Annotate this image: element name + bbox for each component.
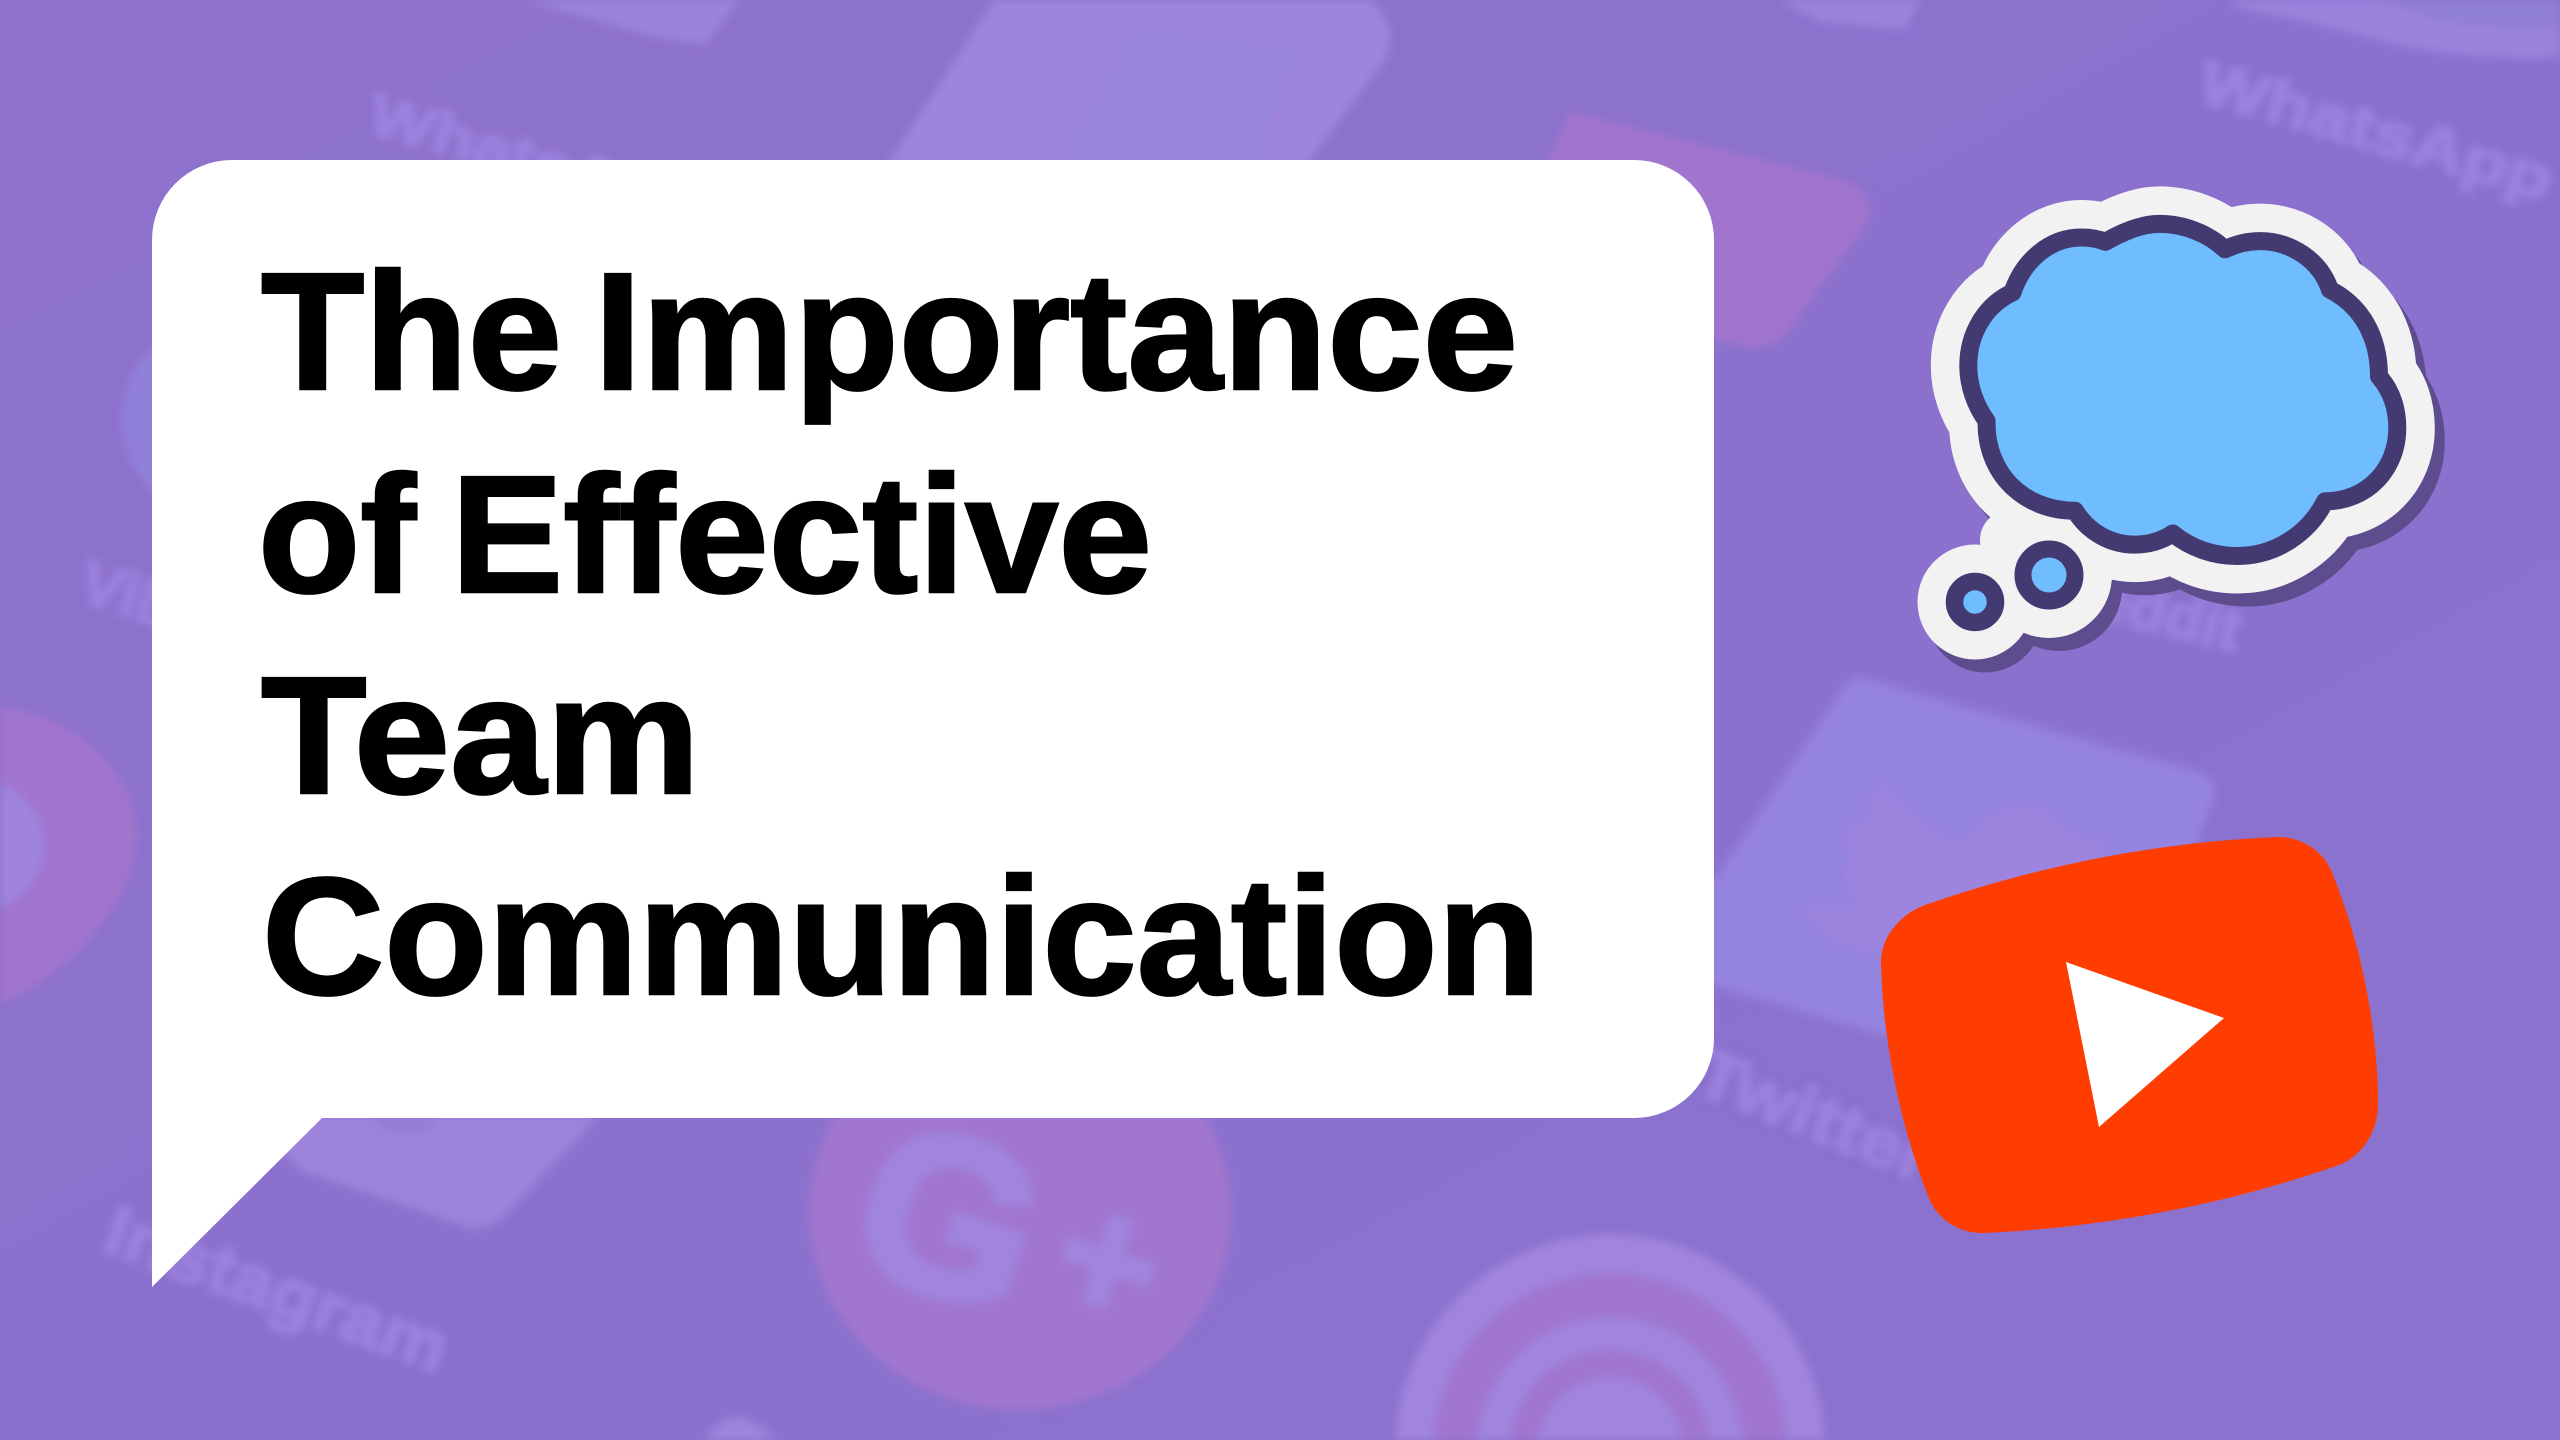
title: Importance	[594, 239, 1518, 425]
backdrop: instagram tile	[275, 1110, 600, 1228]
title: Effective	[451, 442, 1152, 628]
title: Team	[261, 643, 700, 829]
label: Instagram: Instagram	[95, 1191, 460, 1387]
backdrop: target rings	[1395, 1234, 1825, 1440]
large thought dot	[2023, 549, 2075, 601]
backdrop: top centre app tile	[887, 0, 1390, 165]
label: Reddit: Reddit	[2044, 552, 2248, 666]
backdrop: left blue circle	[122, 329, 278, 509]
cloud body	[1968, 224, 2397, 556]
icon: thought cloud	[1918, 224, 2407, 672]
backdrop: top fragments	[525, 0, 2560, 58]
label: Viber: Viber	[71, 548, 244, 663]
backdrop: pink video tile	[1490, 112, 1870, 346]
backdrop: google plus circle: G	[828, 1070, 1072, 1364]
title: of	[258, 442, 416, 628]
backdrop: bottom fragment	[705, 1418, 775, 1440]
cloud white outline	[1918, 224, 2397, 660]
label: WhatsApp left: WhatsApp	[361, 82, 711, 240]
title: The	[261, 239, 562, 425]
label: Twitter: Twitter	[1684, 1033, 1945, 1198]
backdrop: google plus circle: +	[1032, 1155, 1185, 1366]
backdrop: twitter card	[1660, 678, 2215, 1100]
title: Communication	[262, 844, 1541, 1030]
icon: video play button	[1881, 837, 2378, 1233]
small thought dot	[1954, 582, 1996, 622]
label: WhatsApp right: WhatsApp	[2191, 48, 2560, 213]
backdrop: google plus circle	[809, 1014, 1231, 1410]
title	[258, 239, 1541, 1030]
speech bubble	[152, 160, 1714, 1287]
backdrop: left pink circle	[0, 708, 137, 1004]
cloud drop shadow	[1928, 237, 2407, 672]
